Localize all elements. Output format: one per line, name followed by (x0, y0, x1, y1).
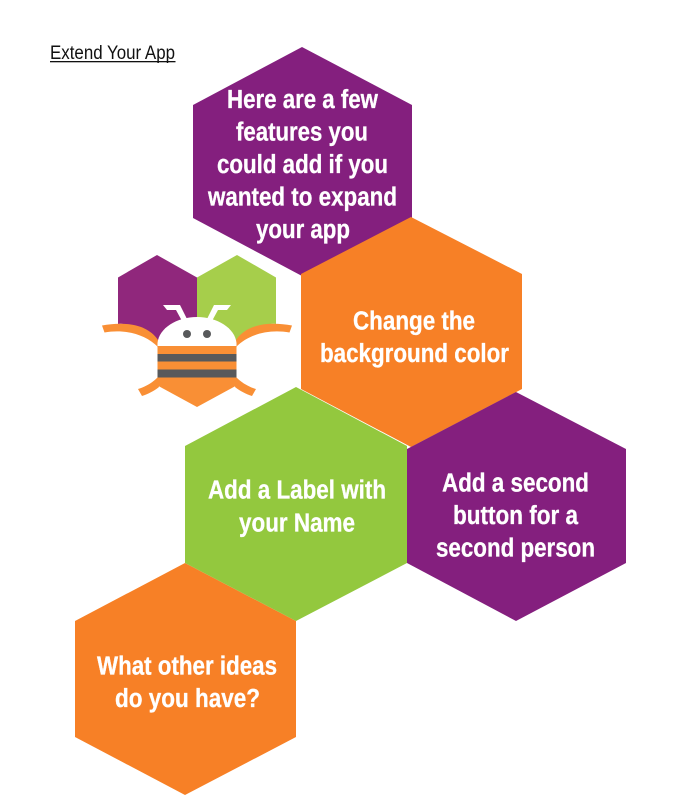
panel: intro hexagon: could add if you (217, 151, 388, 179)
panel: background color hexagon: Change the (353, 308, 475, 336)
icon: left leg (138, 378, 159, 396)
panel: intro hexagon: Here are a few (227, 86, 378, 114)
panel: intro hexagon: wanted to expand (207, 184, 397, 212)
icon: right leg (235, 378, 256, 396)
panel: intro hexagon (193, 47, 412, 276)
panel: intro hexagon: features you (236, 118, 368, 146)
panel: second button hexagon (407, 392, 626, 621)
panel: label hexagon: Add a Label with (208, 476, 386, 504)
icon: right wing (236, 324, 292, 347)
icon: logo purple hexagon (118, 255, 197, 346)
title: Extend Your App (50, 43, 175, 64)
panel: other ideas hexagon: What other ideas (97, 652, 277, 680)
icon: bee eyes (183, 330, 211, 338)
icon: antennae (163, 305, 231, 321)
panel: second button hexagon: Add a second (442, 470, 589, 498)
panel: second button hexagon: second person (436, 534, 595, 562)
icon: bee logo (102, 255, 292, 407)
panel: label hexagon: your Name (239, 510, 355, 538)
icon: logo green hexagon (197, 255, 276, 346)
panel: background color hexagon (301, 217, 522, 447)
panel: label hexagon (185, 387, 407, 621)
panel: second button hexagon: button for a (453, 502, 579, 530)
panel: other ideas hexagon: do you have? (115, 685, 260, 713)
icon: bee striped body (158, 346, 236, 407)
panel: intro hexagon: your app (256, 216, 350, 244)
icon: bee head (158, 317, 236, 346)
panel: background color hexagon: background color (320, 340, 509, 368)
icon: left wing (102, 324, 158, 347)
panel: other ideas hexagon (75, 563, 296, 795)
